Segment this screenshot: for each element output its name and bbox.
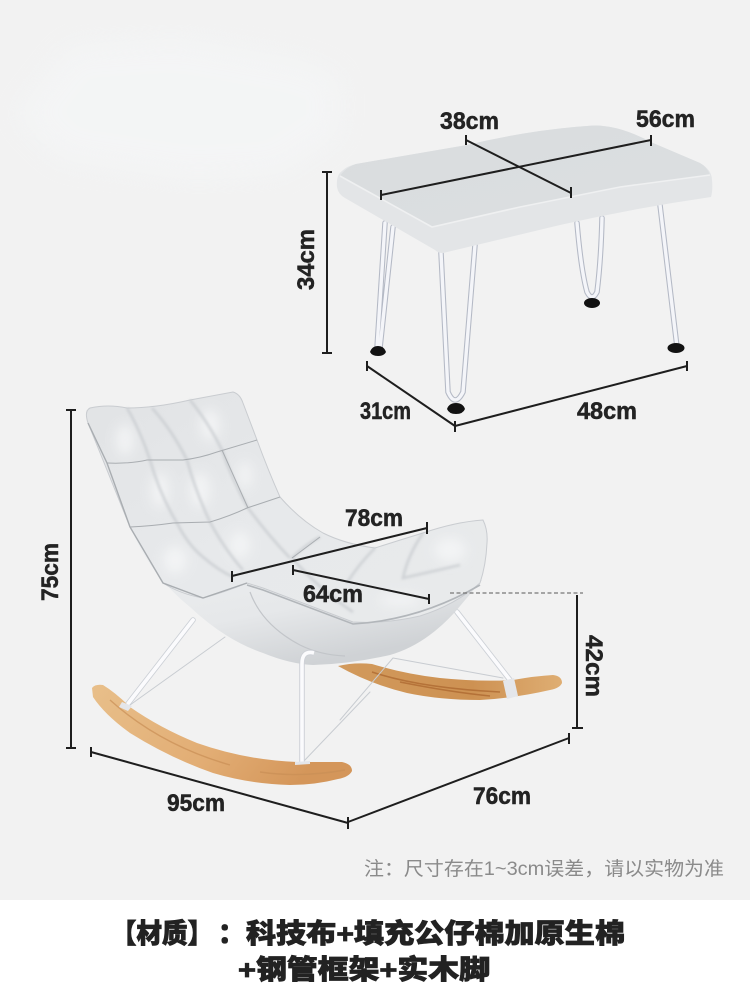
dimension: stool leg depth 31cm (367, 361, 455, 432)
label 34cm: 34cm (293, 229, 320, 290)
label 75cm: 75cm (37, 543, 64, 601)
ottoman cushion top face (340, 126, 710, 227)
label 42cm: 42cm (580, 635, 607, 697)
front rocker grain (110, 700, 345, 775)
cushion seams (88, 423, 480, 624)
material line 1 (111, 918, 625, 949)
label 56cm: 56cm (636, 106, 695, 133)
dimension: chair height 75cm (66, 410, 76, 748)
back rocker grain (372, 672, 500, 696)
dimension: seat height 42cm (572, 595, 583, 728)
note on measurement tolerance: 注：尺寸存在1~3cm误差，请以实物为准 (364, 858, 724, 880)
dimension: stool seat width 56cm (381, 135, 651, 200)
chair cushion (86, 392, 487, 622)
dimension: stool seat depth 38cm (466, 135, 571, 198)
dimension: stool leg width 48cm (455, 361, 687, 426)
material line 1: ： (218, 919, 245, 949)
faint white backdrop patch (15, 38, 340, 180)
ottoman cushion (337, 126, 712, 253)
dimension: chair depth 76cm (348, 733, 569, 822)
chair shell (130, 527, 482, 665)
chair front rocker (92, 685, 352, 785)
material line 1: 【材质】 (111, 918, 213, 949)
label 38cm: 38cm (440, 108, 499, 135)
label 64cm: 64cm (303, 581, 363, 608)
ottoman photo (337, 126, 712, 414)
dimension: chair width 78cm (232, 522, 427, 582)
dimension: stool height 34cm (322, 172, 332, 353)
material line 2: +钢管框架+实木脚 (238, 954, 490, 985)
label 95cm: 95cm (167, 790, 225, 817)
material line 1: 科技布+填充公仔棉加原生棉 (246, 918, 625, 949)
dimension: seat depth 64cm (293, 565, 429, 604)
label 76cm: 76cm (473, 783, 531, 810)
ottoman seam (340, 175, 710, 227)
chair front steel leg (302, 652, 314, 763)
leg brackets (119, 678, 518, 765)
label 48cm: 48cm (577, 398, 637, 425)
chair back rocker (338, 663, 562, 700)
cushion highlights (116, 409, 466, 606)
chair leg inner highlight (302, 652, 314, 763)
inner shell crease (250, 592, 345, 656)
label 31cm: 31cm (360, 398, 411, 425)
cushion soft seam shading (127, 400, 460, 612)
dimension: chair length 95cm (91, 747, 348, 829)
label 78cm: 78cm (345, 505, 403, 532)
chair steel legs and wires (127, 612, 510, 762)
seat height dashed guide (450, 592, 583, 594)
ottoman legs (377, 205, 677, 400)
chair photo (86, 392, 562, 785)
material panel (0, 900, 750, 1000)
ottoman rubber feet (370, 298, 684, 414)
